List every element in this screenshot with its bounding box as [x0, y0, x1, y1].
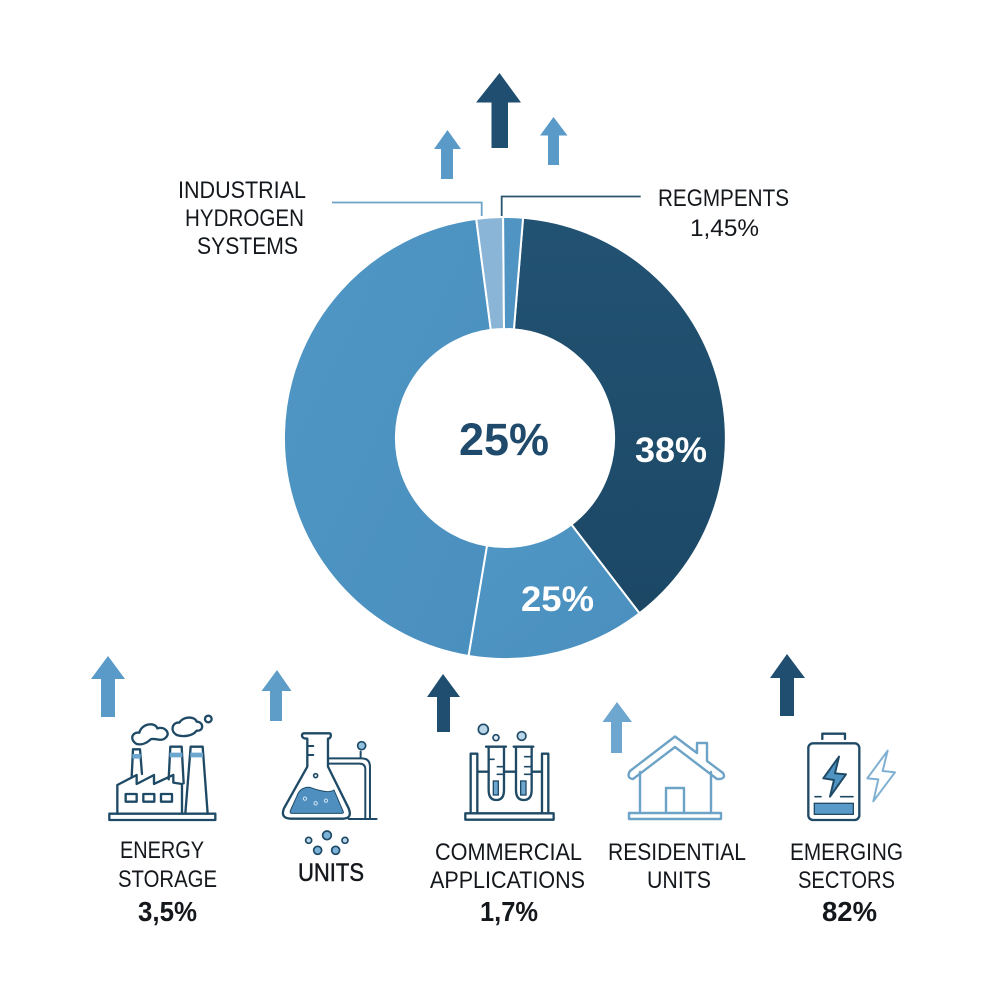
label: residential units: RESIDENTIAL [608, 839, 746, 866]
label: emerging sectors 82%: EMERGING [790, 839, 903, 866]
slice label 38%: 38% [635, 431, 707, 470]
label: commercial applications 1,7%: 1,7% [480, 896, 538, 927]
icon: test tubes [465, 724, 554, 820]
arrow: energy storage [91, 656, 125, 717]
label: regmpents 1,45% [658, 185, 789, 242]
icon: bubbles under flask [306, 831, 348, 854]
arrow: units [262, 670, 292, 721]
slice: 25% medium [468, 524, 640, 659]
label: regmpents 1,45%: REGMPENTS [658, 185, 789, 212]
label: commercial applications 1,7%: COMMERCIAL [435, 839, 582, 866]
arrow: top right [540, 117, 568, 165]
callout line: industrial hydrogen systems [332, 202, 482, 216]
slice: 38% dark [514, 218, 726, 613]
arrow: commercial applications [427, 674, 460, 732]
label: energy storage 3,5%: 3,5% [138, 896, 197, 927]
slice: largest medium [284, 219, 491, 656]
label: regmpents 1,45%: 1,45% [690, 215, 759, 242]
label: energy storage 3,5%: STORAGE [118, 866, 217, 893]
slice label 25%: 25% [521, 580, 594, 619]
donut chart [284, 217, 726, 659]
arrow: residential units [602, 702, 632, 753]
arrow: emerging sectors [770, 654, 805, 716]
label: energy storage 3,5%: ENERGY [120, 837, 204, 864]
icon: factory [109, 716, 215, 820]
label: emerging sectors 82%: SECTORS [798, 867, 895, 894]
label: residential units [608, 839, 746, 894]
label: energy storage 3,5% [118, 837, 217, 927]
slice: industrial hydrogen systems [476, 217, 504, 330]
arrow: top center dark [476, 73, 521, 148]
label: industrial hydrogen systems: SYSTEMS [197, 233, 298, 260]
label: emerging sectors 82% [790, 839, 903, 927]
icon: battery [808, 734, 895, 820]
callout line: regmpents [502, 196, 641, 216]
label: commercial applications 1,7% [430, 839, 585, 927]
label: commercial applications 1,7%: APPLICATIONS [430, 867, 585, 894]
label: emerging sectors 82%: 82% [822, 896, 877, 927]
label: residential units: UNITS [647, 867, 711, 894]
label: industrial hydrogen systems: INDUSTRIAL [178, 177, 306, 204]
label: units: UNITS [298, 859, 364, 887]
slice: regmpents [503, 217, 523, 329]
arrow: top left [434, 130, 461, 179]
label: industrial hydrogen systems: HYDROGEN [185, 205, 304, 232]
label: industrial hydrogen systems [178, 177, 306, 260]
icon: house [629, 736, 724, 819]
center value: 25% [459, 414, 549, 465]
icon: flask [283, 733, 377, 819]
